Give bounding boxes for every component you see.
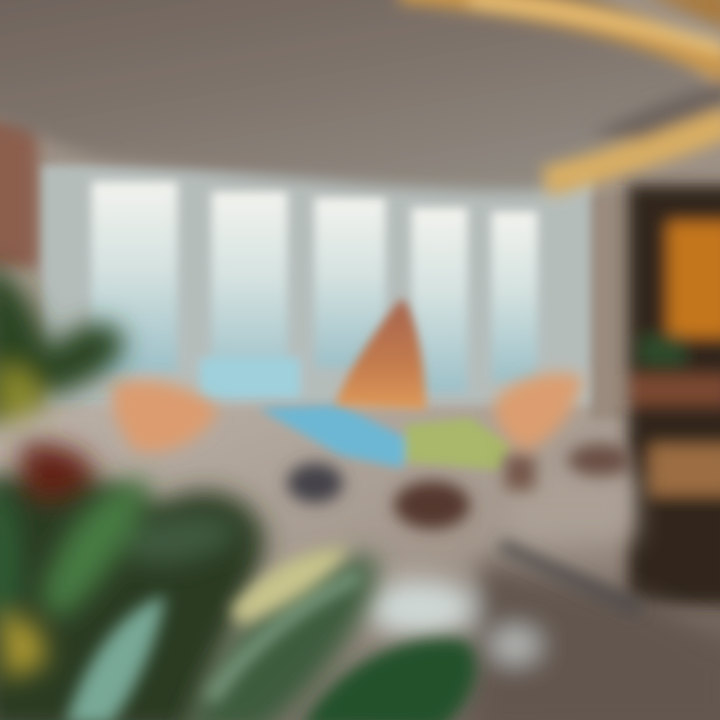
bottom dark green leaf <box>300 638 476 720</box>
ceiling <box>0 0 712 191</box>
left orange chair <box>112 380 218 452</box>
floor shadow stripe <box>500 545 640 610</box>
mid green leaves <box>0 480 240 680</box>
left wall <box>0 115 50 410</box>
triangular orange sculpture <box>335 298 426 410</box>
light teal leaf <box>65 595 165 720</box>
floor reflections <box>365 470 720 720</box>
ceiling lights <box>400 0 720 182</box>
window wall <box>42 165 626 420</box>
foreground plant <box>0 265 476 720</box>
dark leaves behind <box>0 265 265 720</box>
large right leaves <box>185 555 376 720</box>
painting <box>668 222 720 337</box>
rug blue and green <box>258 405 512 470</box>
small dark tables and stools <box>287 444 632 529</box>
right orange chair <box>495 373 584 490</box>
right dark wall with painting <box>628 185 720 605</box>
pale leaf highlights <box>210 548 360 700</box>
